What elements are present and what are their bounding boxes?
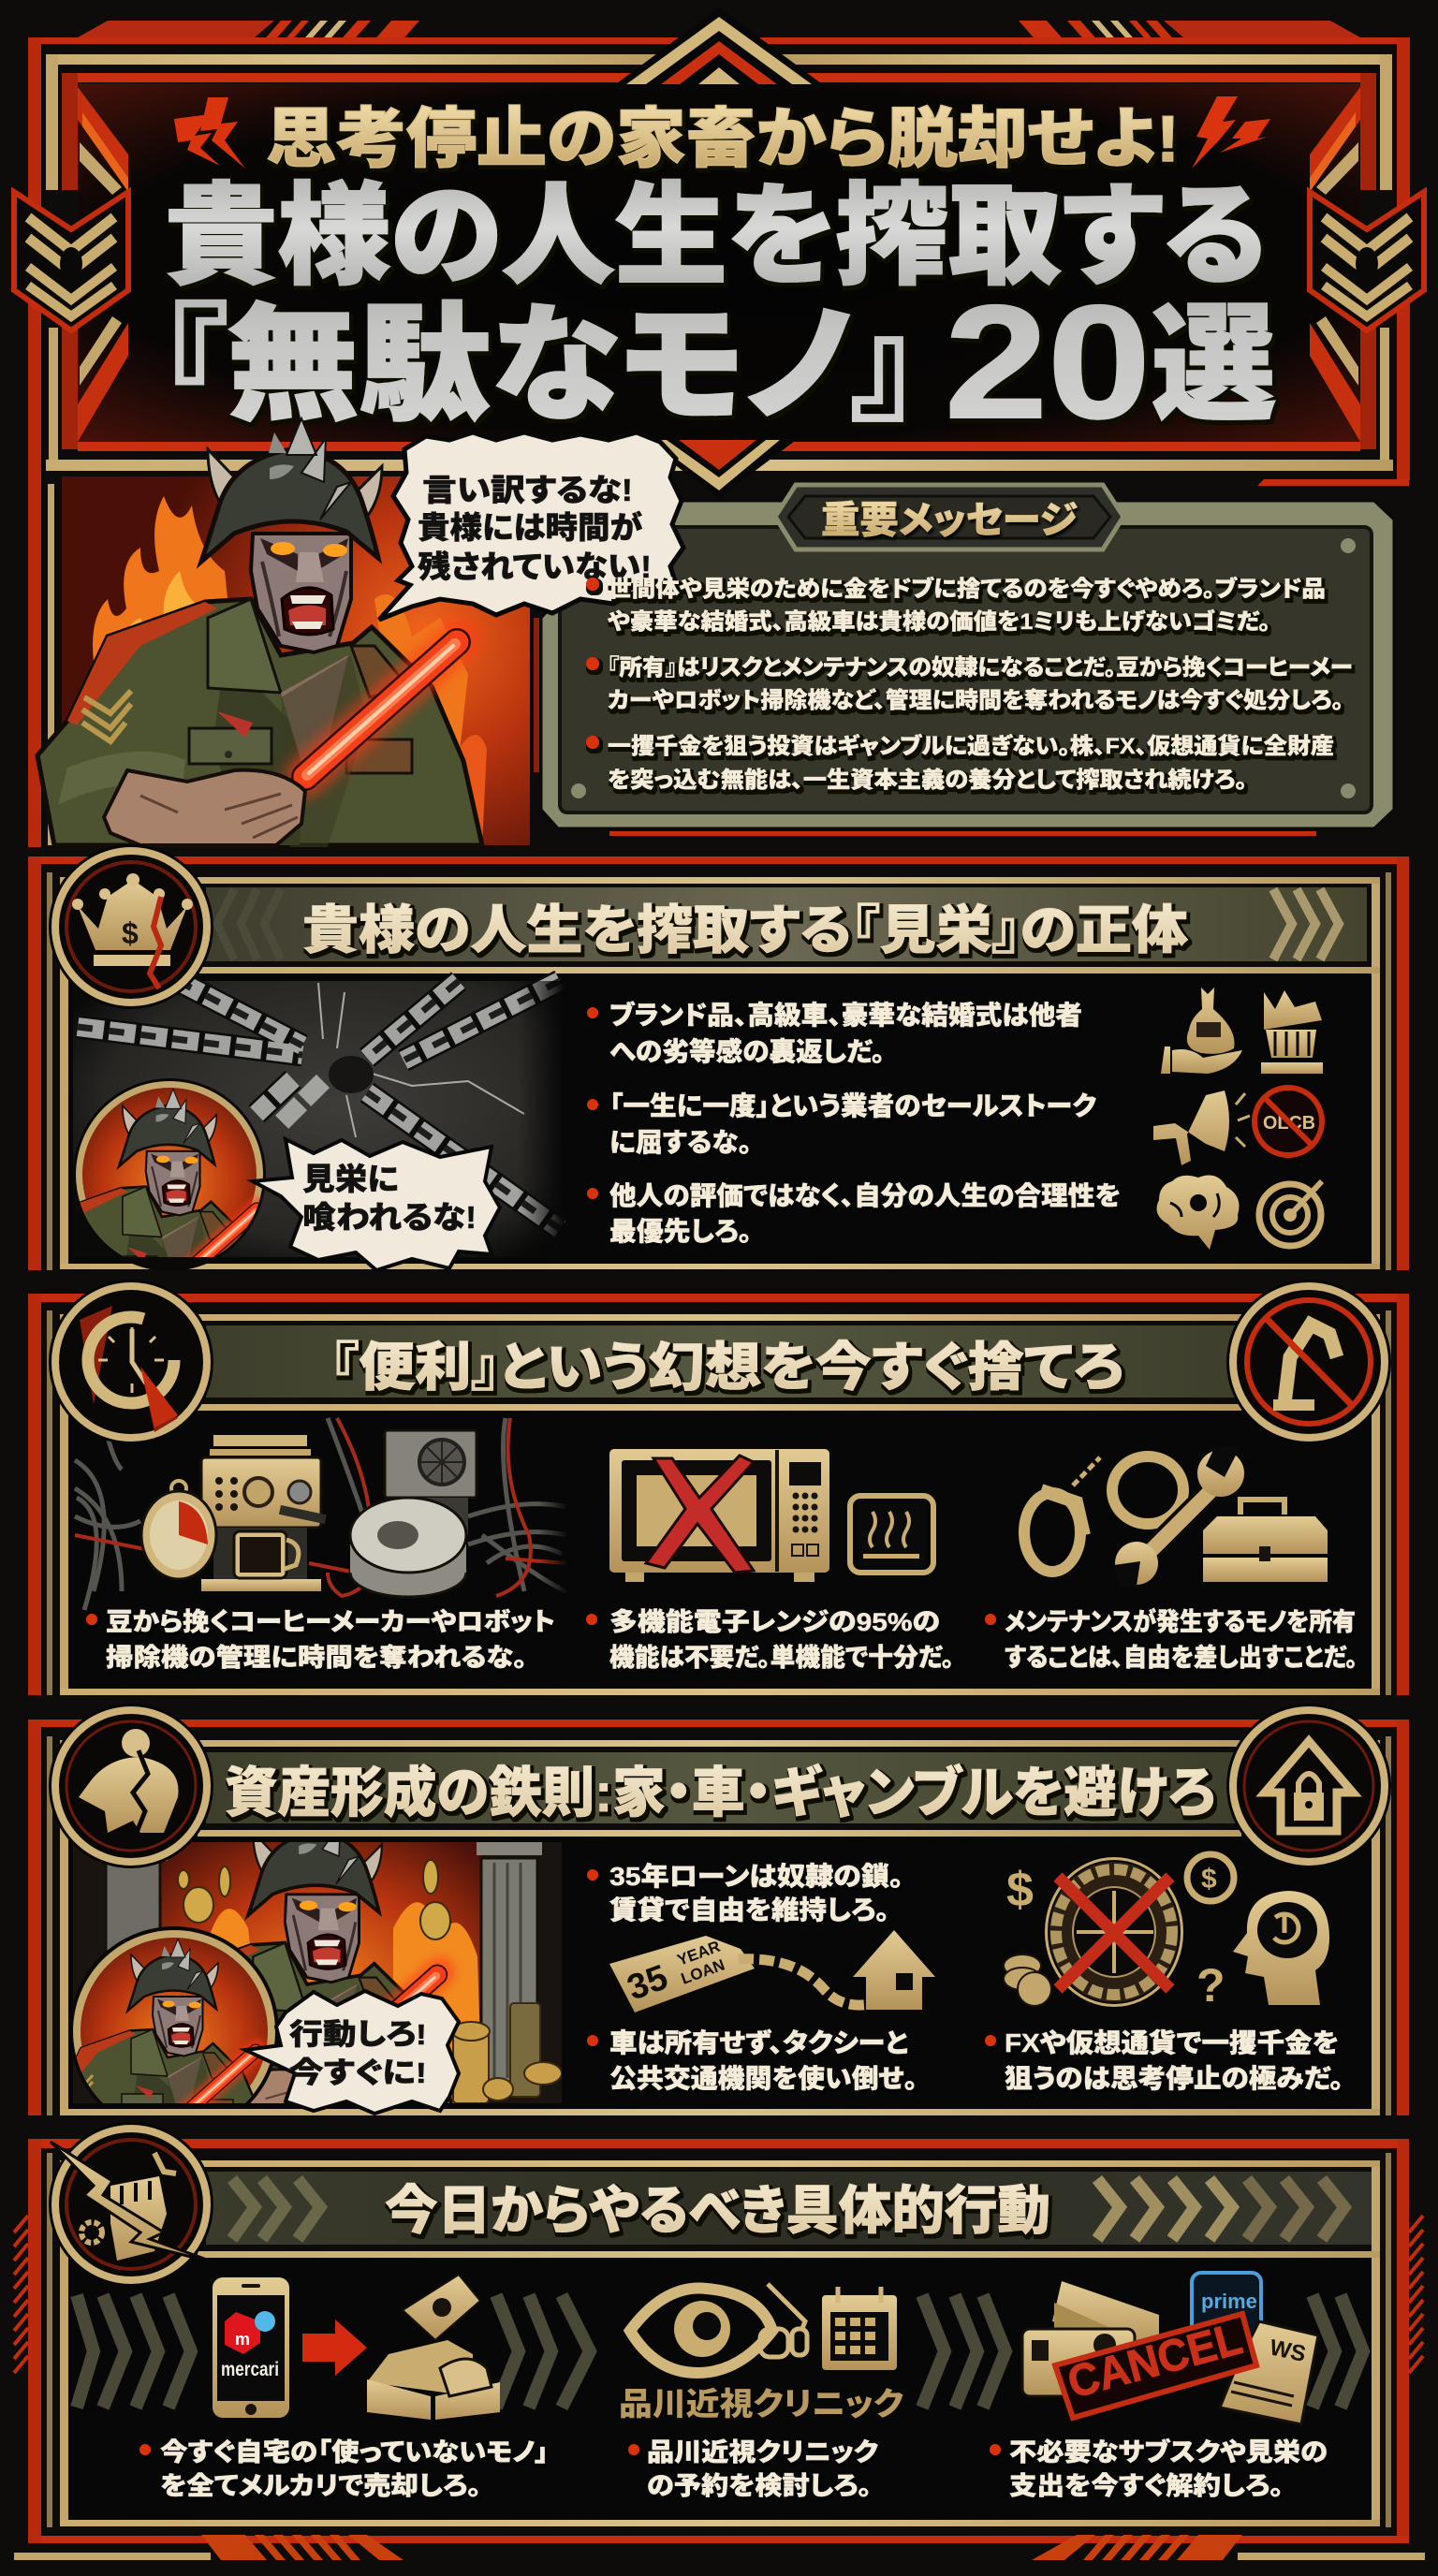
heading ribbon: 『便利』という幻想を今すぐ捨てろ: [330, 1338, 1123, 1397]
icon: dollar and coin: $: [1006, 1863, 1034, 1917]
bottom frame: [14, 2535, 1425, 2560]
bullet list: 機能は不要だ。単機能で十分だ。: [609, 1644, 954, 1672]
loan tag: [609, 1936, 755, 2012]
bullet list: [587, 1000, 1121, 1246]
icon: brain: [1157, 1176, 1240, 1250]
icon: credit cards: [1022, 2281, 1159, 2396]
robot vacuum: [350, 1498, 466, 1597]
bullet list: 品川近視クリニック: [647, 2438, 878, 2466]
power supply box: [385, 1430, 477, 1535]
icon: target: [1259, 1181, 1322, 1246]
chain to house: [739, 1959, 875, 2005]
emblem: house with lock: [1226, 1704, 1391, 1868]
icon: question mark: ?: [1196, 1959, 1225, 2012]
speech bubble text: 貴様には時間が: [418, 510, 642, 545]
chevron badge left: [14, 192, 128, 330]
small soldier medallion: [73, 1926, 279, 2103]
icon: megaphone: [1153, 1090, 1250, 1165]
icon: toolbox: [1203, 1500, 1328, 1582]
background chevrons: [77, 2295, 1363, 2408]
icon: broken column: [1261, 990, 1323, 1074]
loan tag: 35: [623, 1958, 673, 2008]
emblem: broken piggy bank: [49, 1704, 213, 1868]
bullet list: [587, 1862, 1343, 2093]
clinic name label: 品川近視クリニック: [619, 2387, 904, 2422]
icon: phone with mercari: mercari: [221, 2359, 279, 2380]
bullet list: [86, 1607, 1357, 1672]
bullet list: [139, 2437, 1328, 2500]
title text: [161, 102, 1276, 452]
arrow: red: [302, 2320, 367, 2376]
header frame: left half: [14, 21, 679, 480]
bullet list: 車は所有せず、タクシーと: [609, 2028, 908, 2057]
panel: key message plate: [541, 485, 1394, 836]
speech bubble text: 言い訳するな!: [422, 473, 633, 507]
message bullets: カーやロボット掃除機など、管理に時間を奪われるモノは今すぐ処分しろ。: [608, 687, 1343, 713]
emblem: no robot arm: [1226, 1280, 1391, 1444]
bullet list: ブランド品、高級車、豪華な結婚式は他者: [609, 1000, 1082, 1030]
icon: head with power symbol: [1233, 1891, 1329, 2005]
speech bubble: vanity: 喰われるな!: [302, 1200, 477, 1235]
panel: section 3 asset rules: [28, 1720, 1409, 2153]
bullet list: 多機能電子レンジの95%の: [609, 1608, 940, 1636]
speech bubble: vanity: 見栄に: [302, 1162, 399, 1196]
speech bubble: act now: [245, 1991, 459, 2114]
icon: dollar and coin: $: [1201, 1864, 1217, 1895]
bullet list: 狙うのは思考停止の極みだ。: [1005, 2064, 1343, 2093]
header frame: [14, 21, 1424, 480]
speech bubble: act now: 今すぐに!: [289, 2056, 427, 2089]
message bullets: [586, 576, 1353, 793]
speech bubble: hero: [379, 432, 683, 620]
bullet list: することは、自由を差し出すことだ。: [1005, 1644, 1357, 1672]
title: lightning icons: [174, 96, 1270, 168]
stopwatch: [141, 1481, 216, 1579]
message bullets: 世間体や見栄のために金をドブに捨てるのを今すぐやめろ。ブランド品: [608, 576, 1326, 602]
icon: coin stack: [1004, 1954, 1051, 2006]
bullet list: 掃除機の管理に時間を奪われるな。: [106, 1643, 527, 1672]
icon: microwave with X: [609, 1449, 829, 1582]
bullet list: 今すぐ自宅の「使っていないモノ」: [160, 2437, 549, 2466]
icon: lightning left: [174, 97, 245, 168]
illustration: small soldier medallion: [73, 1078, 266, 1269]
icon: dollar and coin: [1006, 1854, 1234, 1917]
heading ribbon: 資産形成の鉄則:家・車・ギャンブルを避けろ: [225, 1763, 1215, 1823]
icon: no OLCB sign: [1255, 1088, 1322, 1155]
message bullets: や豪華な結婚式、高級車は貴様の価値を1ミリも上げないゴミだ。: [607, 608, 1270, 635]
loan tag: YEAR: [675, 1938, 723, 1969]
bullet list: FXや仮想通貨で一攫千金を: [1005, 2027, 1339, 2057]
coffee maker: [201, 1435, 327, 1591]
bullet list: 賃貸で自由を維持しろ。: [609, 1895, 889, 1925]
icon: handcuffs: [1024, 1456, 1183, 1572]
floating coins: [178, 1860, 450, 1939]
message bullets: 一攫千金を狙う投資はギャンブルに過ぎない。株、FX、仮想通貨に全財産: [608, 733, 1334, 759]
message bullets: を突っ込む無能は、一生資本主義の養分として搾取され続けろ。: [608, 767, 1247, 793]
heading ribbon: [198, 877, 1380, 973]
bullet list: 「一生に一度」という業者のセールストーク: [609, 1091, 1096, 1120]
title line 3: [161, 272, 1276, 452]
coin stacks: [452, 2003, 562, 2103]
hero illustration: fire background: [28, 476, 539, 847]
heading ribbon: [198, 2160, 1380, 2258]
icon: boxes and money: [367, 2275, 500, 2420]
title line 3: 『無駄なモノ』: [161, 294, 917, 436]
cancel stamp: CANCEL: [1063, 2314, 1247, 2408]
title panel: [78, 83, 1360, 443]
emblem: fist and lightning: [49, 2122, 217, 2287]
panel: section 1 vanity: [28, 856, 1409, 1270]
speech bubble text: [418, 473, 652, 584]
bullet list: に屈するな。: [609, 1128, 752, 1157]
heading plaque: 重要メッセージ: [821, 500, 1078, 541]
icon: wrench: [1114, 1446, 1244, 1588]
bullet list: への劣等感の裏返しだ。: [609, 1036, 885, 1066]
bullet list: 豆から挽くコーヒーメーカーやロボット: [106, 1608, 555, 1636]
heading ribbon: [198, 1314, 1241, 1411]
heading ribbon: 貴様の人生を搾取する『見栄』の正体: [302, 900, 1188, 959]
icon: newspaper: WS: [1268, 2334, 1308, 2367]
panel: section 2 convenience: [28, 1294, 1409, 1695]
bullet list: 支出を今すぐ解約しろ。: [1009, 2471, 1284, 2500]
columns: [98, 1842, 542, 2083]
heading ribbon: [198, 1740, 1241, 1837]
icon: calendar: [822, 2287, 897, 2370]
heading plaque: [775, 485, 1123, 549]
icon: phone with mercari: m: [235, 2330, 250, 2349]
emblem: clock: [49, 1280, 213, 1444]
illustration: coffee maker and robot vacuum: [75, 1416, 568, 1610]
coffee cup: [234, 1531, 299, 1578]
illustration: soldier, columns and coins: [73, 1842, 562, 2103]
roulette with X: [1045, 1857, 1183, 2007]
bullet list: を全てメルカリで売却しろ。: [160, 2472, 481, 2500]
hero illustration: soldier: [37, 418, 482, 847]
bullet list: 最優先しろ。: [609, 1217, 752, 1246]
title line 1: 思考停止の家畜から脱却せよ!: [266, 102, 1180, 175]
bullet list: 他人の評価ではなく、自分の人生の合理性を: [609, 1181, 1121, 1210]
message bullets: 『所有』はリスクとメンテナンスの奴隷になることだ。豆から挽くコーヒーメー: [608, 655, 1353, 681]
icon: lightning right: [1192, 96, 1270, 168]
icon: phone with mercari: [213, 2277, 289, 2418]
icon: eye and glasses: [630, 2284, 807, 2373]
emblem: crown: $: [122, 916, 139, 950]
emblem: crown: [49, 844, 213, 1009]
header bottom frame: [46, 442, 1409, 486]
icon: money bag on hand: [1161, 988, 1242, 1074]
icon: simple heat icon: [850, 1496, 933, 1573]
icon: house: [853, 1930, 935, 2010]
loan tag: LOAN: [679, 1955, 727, 1988]
bottom triangle ornament: [639, 438, 799, 498]
bullet list: メンテナンスが発生するモノを所有: [1005, 1607, 1356, 1636]
bullet list: 公共交通機関を使い倒せ。: [609, 2064, 917, 2093]
bullet list: 不必要なサブスクや見栄の: [1009, 2437, 1328, 2466]
title line 3: 選: [1152, 294, 1276, 436]
icon: prime app: prime: [1201, 2290, 1257, 2313]
speech bubble: vanity: [253, 1139, 500, 1270]
icon: no OLCB sign: OLCB: [1263, 1113, 1315, 1134]
bullet list: 35年ローンは奴隷の鎖。: [609, 1862, 903, 1891]
top triangle ornament: [609, 7, 829, 89]
icon: prime app: [1192, 2273, 1261, 2344]
heading ribbon: 今日からやるべき具体的行動: [385, 2181, 1050, 2240]
panel: section 4 action: [14, 2139, 1425, 2560]
side hatching: [14, 2216, 1423, 2373]
speech bubble: act now: 行動しろ!: [289, 2018, 427, 2051]
illustration: broken chains: [73, 981, 565, 1257]
icon: newspaper: [1220, 2321, 1318, 2424]
title line 2: 貴様の人生を搾取する: [165, 175, 1267, 299]
speech bubble text: 残されていない!: [418, 549, 652, 584]
bullet list: の予約を検討しろ。: [647, 2472, 872, 2500]
title line 3: 20: [945, 272, 1151, 452]
